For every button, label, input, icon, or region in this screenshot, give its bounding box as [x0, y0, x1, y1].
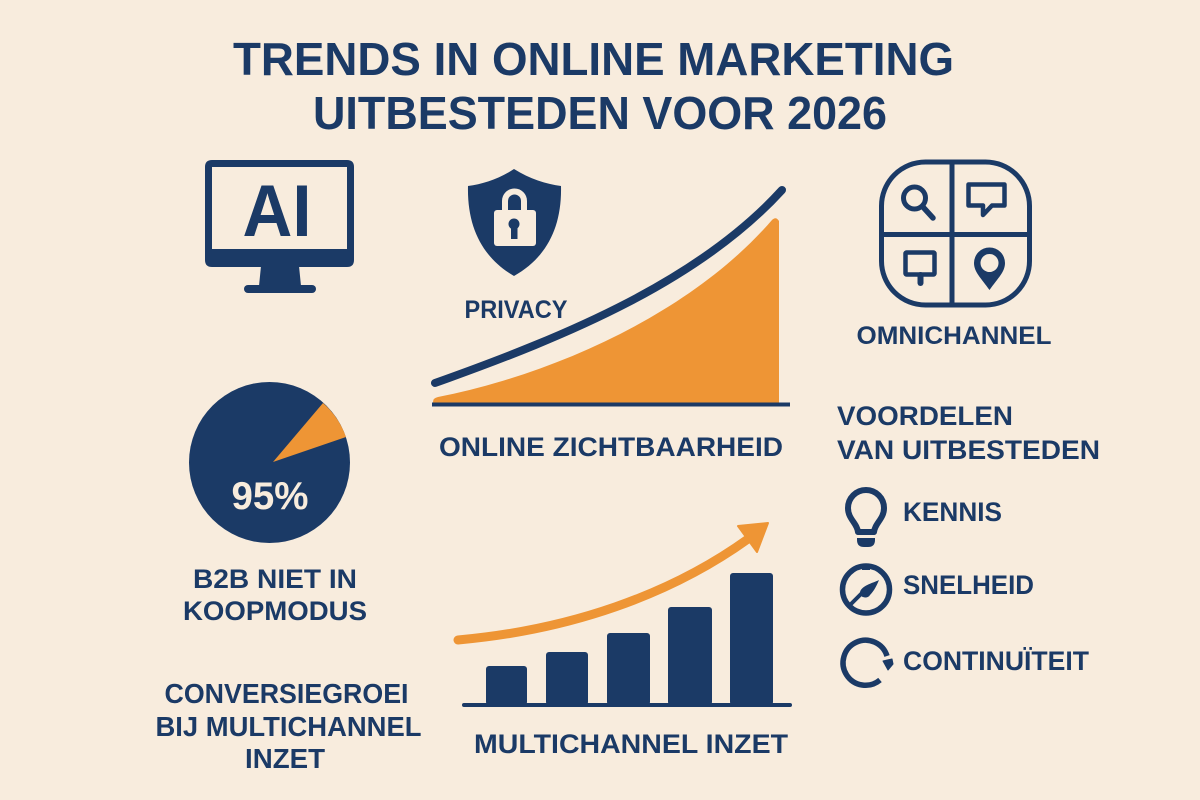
label: continuiteit: CONTINUÏTEIT	[903, 646, 1089, 676]
bar chart: multichannel inzet	[462, 573, 792, 707]
label: B2B niet in koopmodus: KOOPMODUS	[183, 596, 367, 626]
pie chart: 95%: 95%	[232, 475, 308, 518]
arrow: growth	[458, 523, 768, 640]
icon: AI monitor	[205, 160, 354, 293]
label: omnichannel: OMNICHANNEL	[856, 322, 1052, 350]
label: B2B niet in koopmodus: B2B NIET IN	[193, 564, 357, 594]
chart: online zichtbaarheid	[432, 190, 790, 406]
label: conversiegroei: CONVERSIEGROEI	[164, 678, 408, 709]
icon: continuity arrow	[843, 640, 893, 685]
icon: lightbulb	[848, 490, 884, 547]
title: TRENDS IN ONLINE MARKETING	[233, 33, 954, 85]
label: privacy: PRIVACY	[464, 296, 568, 324]
title: UITBESTEDEN VOOR 2026	[313, 87, 887, 139]
icon: AI monitor: AI	[242, 171, 312, 252]
search glyph	[904, 187, 933, 218]
icon: privacy shield	[468, 169, 561, 276]
title	[233, 33, 954, 139]
icon: omnichannel grid	[881, 162, 1030, 305]
heading: voordelen van uitbesteden: VAN UITBESTEDEN	[837, 435, 1100, 465]
location pin	[974, 247, 1005, 290]
chat glyph top	[968, 184, 1004, 215]
pie chart: 95%	[189, 382, 350, 543]
heading: voordelen van uitbesteden: VOORDELEN	[837, 401, 1013, 431]
label: conversiegroei	[156, 678, 422, 774]
label: conversiegroei: INZET	[245, 743, 325, 774]
chat glyph bottom	[906, 252, 934, 283]
icon: compass	[842, 564, 890, 613]
label: B2B niet in koopmodus	[183, 564, 367, 626]
label: snelheid: SNELHEID	[903, 570, 1034, 600]
heading: voordelen van uitbesteden	[837, 401, 1100, 465]
label: online zichtbaarheid: ONLINE ZICHTBAARHEID	[439, 432, 783, 462]
label: multichannel inzet: MULTICHANNEL INZET	[474, 729, 789, 759]
label: kennis: KENNIS	[903, 497, 1002, 527]
label: conversiegroei: BIJ MULTICHANNEL	[156, 711, 422, 742]
